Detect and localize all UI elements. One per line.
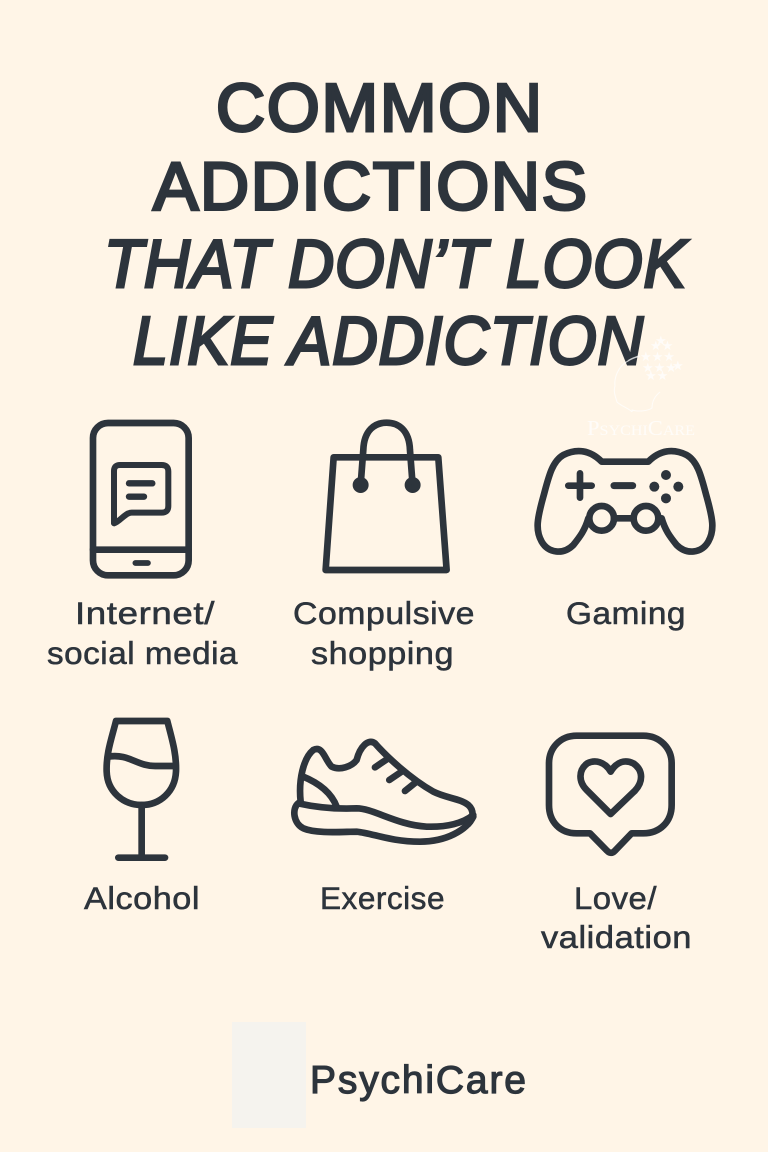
watermark: PsychiCare logo: ★★★ (642, 360, 677, 375)
label: Internet/social media: Internet/ (75, 595, 215, 631)
icon: heart speech bubble (549, 736, 672, 853)
label: Internet/social media (47, 595, 238, 671)
title: LIKE ADDICTION (133, 303, 644, 379)
footer logo placeholder (232, 1022, 306, 1128)
watermark: PsychiCare logo: PsychiCare (587, 416, 695, 440)
icon: phone with chat bubble (93, 423, 189, 575)
icon: shopping bag (326, 423, 447, 570)
title: THAT DON’T LOOK (104, 226, 689, 302)
label: Exercise: Exercise (320, 880, 445, 916)
title (104, 70, 689, 379)
title: COMMON (216, 70, 542, 146)
watermark: PsychiCare logo: ★★ (650, 338, 673, 353)
icon: game controller (538, 451, 712, 552)
icon: wine glass (107, 721, 176, 858)
title: ADDICTIONS (153, 148, 587, 224)
label: Compulsive shopping (293, 595, 475, 671)
label: Internet/social media: social media (47, 635, 238, 671)
label: Love/validation (541, 880, 692, 955)
watermark: PsychiCare logo (587, 333, 695, 440)
label: Alcohol: Alcohol (84, 880, 200, 916)
watermark: PsychiCare logo: ★ (655, 333, 667, 348)
icon: running shoe (294, 742, 473, 842)
footer brand name: PsychiCare (310, 1059, 526, 1102)
watermark: PsychiCare logo: ★ (672, 358, 684, 373)
label: Gaming: Gaming (566, 595, 686, 631)
watermark: PsychiCare logo: ★★★ (640, 349, 675, 364)
label: Love/validation: validation (541, 919, 692, 955)
label: Compulsive shopping: shopping (311, 635, 454, 671)
label: Love/validation: Love/ (574, 880, 657, 916)
label: Compulsive shopping: Compulsive (293, 595, 475, 631)
watermark: PsychiCare logo: ★★ (645, 368, 668, 383)
